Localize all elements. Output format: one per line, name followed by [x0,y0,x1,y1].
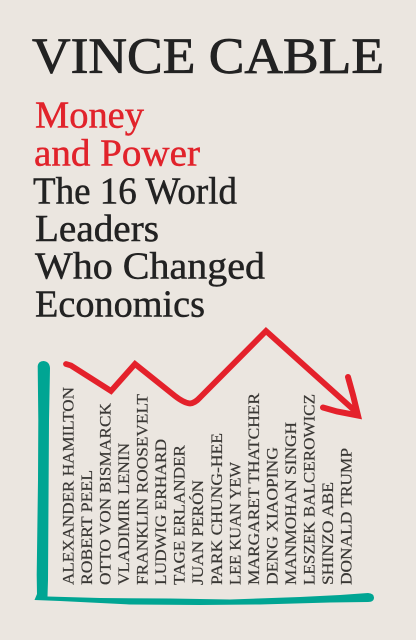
leader names: LESZEK BALCEROWICZ [302,394,319,585]
title in red: Money [35,95,144,137]
leader names: SHINZO ABE [320,482,337,585]
chart axes [34,361,374,605]
title in red: and Power [34,132,200,174]
leader names: PARK CHUNG-HEE [209,433,226,585]
leader names: DENG XIAOPING [264,447,282,585]
subtitle [33,170,265,325]
leader names: ALEXANDER HAMILTON [60,387,77,585]
subtitle: The 16 World [33,170,237,212]
red trend line with arrow [66,331,358,416]
leader names: VLADIMIR LENIN [116,443,133,585]
leader names: ROBERT PEEL [79,470,96,585]
subtitle: Economics [35,283,205,325]
leader names: OTTO VON BISMARCK [97,403,114,585]
leader names: TAGE ERLANDER [172,444,189,585]
subtitle: Leaders [35,208,159,250]
author name: VINCE CABLE [32,29,384,85]
leader names: MARGARET THATCHER [246,392,263,585]
leader names: FRANKLIN ROOSEVELT [134,393,152,585]
leader names: DONALD TRUMP [339,448,356,585]
subtitle: Who Changed [35,246,265,288]
leader names: JUAN PERÓN [190,480,207,585]
leader names: MANMOHAN SINGH [283,422,300,585]
title in red [34,95,200,174]
leader names [60,387,356,585]
leader names: LUDWIG ERHARD [153,439,170,585]
leader names: LEE KUAN YEW [227,462,244,585]
